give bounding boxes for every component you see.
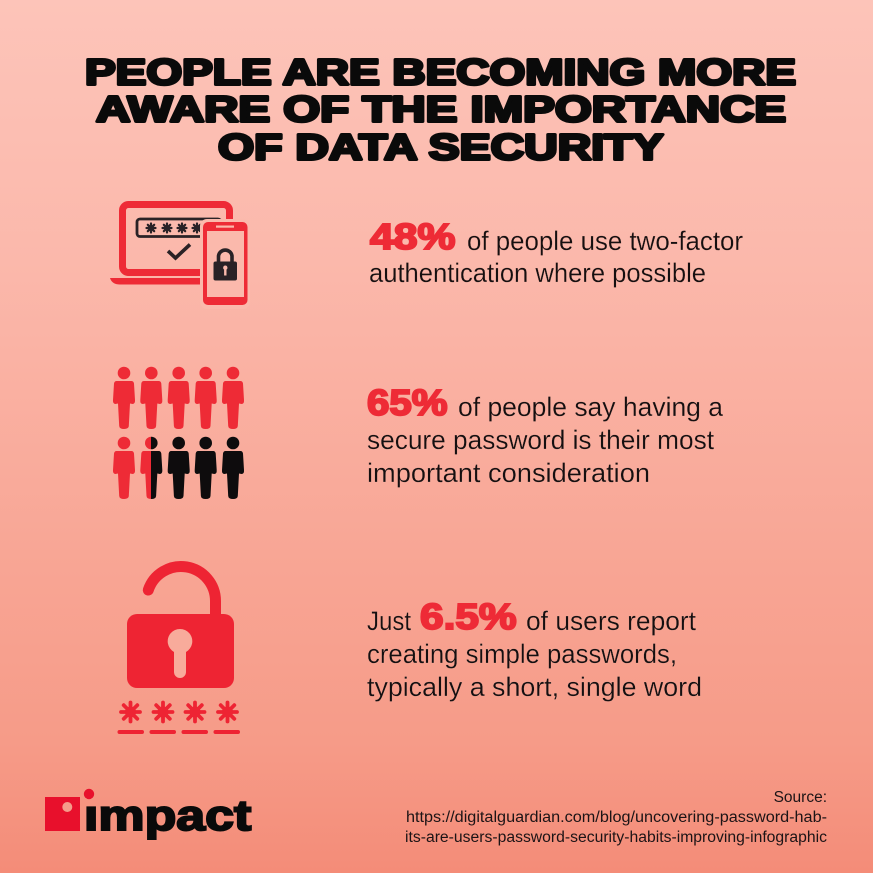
text: 6.5% stat: 6.5% bbox=[420, 597, 517, 637]
source note: Source: bbox=[774, 789, 827, 806]
logo dot bbox=[84, 789, 94, 799]
laptop screen frame bbox=[122, 204, 230, 272]
shackle bbox=[148, 566, 216, 618]
password field bbox=[137, 219, 221, 236]
text: 65% stat: 65% bbox=[367, 383, 447, 423]
source note bbox=[405, 789, 827, 846]
check mark bbox=[168, 244, 190, 258]
icon: ten people pictogram bbox=[113, 367, 244, 499]
text: 65% stat: of people say having a bbox=[458, 392, 724, 422]
top row of red people bbox=[113, 367, 244, 429]
bottom row, 6.5 of 10 shaded red bbox=[113, 437, 244, 499]
source note: its-are-users-password-security-habits-improving-infographic bbox=[405, 829, 827, 846]
text: 48% stat: authentication where possible bbox=[369, 258, 706, 288]
title bbox=[85, 52, 796, 167]
phone padlock bbox=[218, 250, 232, 263]
text: 65% stat: important consideration bbox=[367, 458, 650, 488]
password asterisks bbox=[146, 224, 202, 232]
text: 65% stat: secure password is their most bbox=[367, 425, 714, 455]
text: 6.5% stat: creating simple passwords, bbox=[367, 639, 677, 669]
phone bbox=[200, 219, 250, 309]
source note: https://digitalguardian.com/blog/uncovering-password-hab- bbox=[406, 809, 827, 826]
keyhole bbox=[168, 629, 192, 678]
logo: impact bbox=[45, 789, 251, 840]
text: 48% stat: 48% bbox=[370, 217, 455, 257]
title: OF DATA SECURITY bbox=[218, 127, 664, 167]
icon: open padlock with password bbox=[120, 566, 238, 732]
asterisks bbox=[121, 702, 237, 722]
lock body bbox=[127, 614, 234, 688]
text: 48% stat: of people use two-factor bbox=[467, 226, 743, 256]
logo wordmark: impact bbox=[84, 792, 251, 840]
title: AWARE OF THE IMPORTANCE bbox=[96, 89, 786, 130]
text: 6.5% stat bbox=[367, 597, 702, 702]
laptop base bbox=[110, 278, 205, 284]
underscores bbox=[120, 730, 238, 734]
text: 48% stat bbox=[369, 217, 743, 288]
text: 6.5% stat: typically a short, single word bbox=[367, 672, 702, 702]
text: 6.5% stat: Just bbox=[367, 606, 411, 636]
text: 6.5% stat: of users report bbox=[526, 606, 696, 636]
icon: laptop and phone with password bbox=[110, 204, 250, 309]
text: 65% stat bbox=[367, 383, 724, 488]
logo square bbox=[45, 797, 80, 831]
